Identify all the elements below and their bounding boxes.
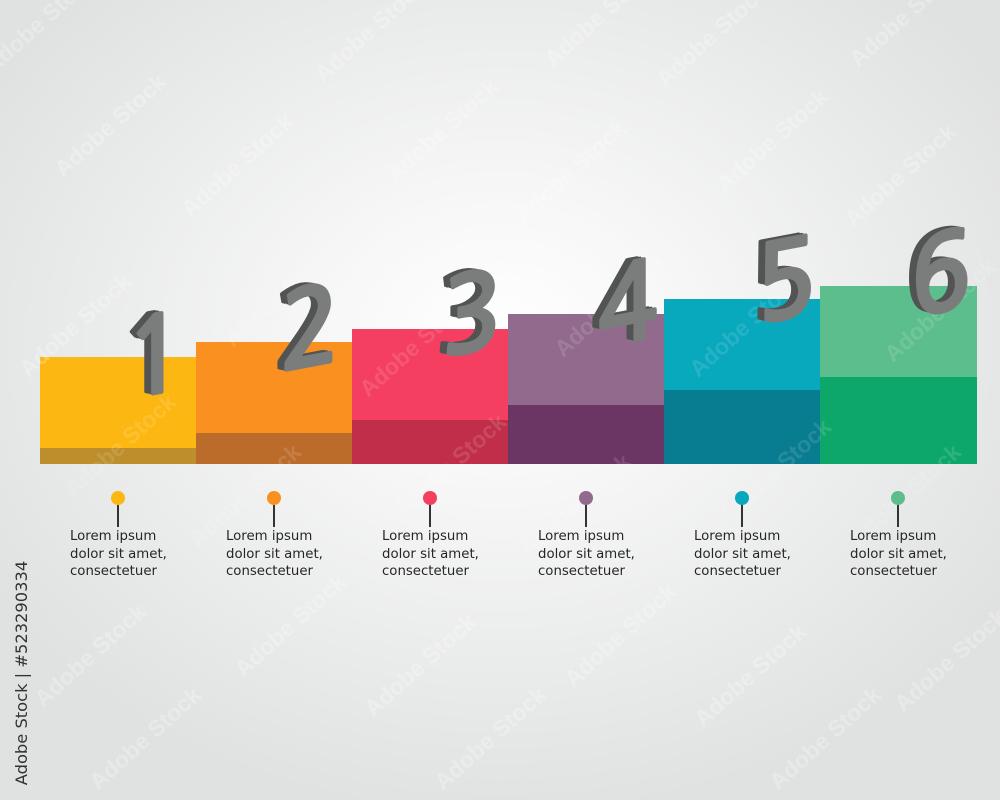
number 6: 6 [910, 216, 972, 334]
item 4: pin and text: consectetuer [538, 564, 625, 579]
watermark pattern: Adobe Stock [14, 268, 136, 382]
watermark pattern: Adobe Stock [684, 268, 806, 382]
item 6: pin and text [850, 491, 947, 579]
number 1: 1 [124, 298, 186, 416]
item 4: pin and text [538, 491, 635, 579]
item 3: pin and text [382, 491, 479, 579]
item 5: pin and text: Lorem ipsum [694, 529, 780, 544]
watermark pattern: Adobe Stock [59, 388, 181, 502]
item 3: pin and text: dolor sit amet, [382, 546, 479, 562]
item 2: pin and text: dolor sit amet, [226, 546, 323, 562]
bar 4 [508, 314, 664, 464]
item 6: pin and text: dolor sit amet, [850, 546, 947, 562]
stock id side text: Adobe Stock | #523290334 [12, 561, 31, 785]
item 5: pin and text [694, 491, 791, 579]
bar 5 [664, 299, 820, 464]
watermark pattern: Adobe Stock [176, 108, 298, 222]
watermark pattern: Adobe Stock [229, 568, 351, 682]
watermark pattern: Adobe Stock [359, 608, 481, 722]
item 4: pin and text: Lorem ipsum [538, 529, 624, 544]
bar 1 [40, 357, 196, 464]
item 2: pin and text: consectetuer [226, 564, 313, 579]
bar 3 [352, 329, 508, 464]
item 2: pin and text [226, 491, 323, 579]
watermark pattern: Adobe Stock [84, 681, 206, 795]
item 2: pin and text: Lorem ipsum [226, 529, 312, 544]
watermark pattern: Adobe Stock [49, 68, 171, 182]
item 1: pin and text: consectetuer [70, 564, 157, 579]
watermark pattern: Adobe Stock [764, 681, 886, 795]
item 3: pin and text: consectetuer [382, 564, 469, 579]
watermark pattern: Adobe Stock [509, 115, 631, 229]
item 5: pin and text: consectetuer [694, 564, 781, 579]
watermark pattern: Adobe Stock [839, 118, 961, 232]
watermark pattern: Adobe Stock [354, 288, 476, 402]
watermark pattern: Adobe Stock [389, 408, 511, 522]
item 1: pin and text: Lorem ipsum [70, 529, 156, 544]
watermark pattern: Adobe Stock [711, 83, 833, 197]
watermark pattern: Adobe Stock [879, 253, 1000, 367]
number 5: 5 [755, 223, 817, 341]
number 3: 3 [441, 256, 503, 374]
item 4: pin and text: dolor sit amet, [538, 546, 635, 562]
watermark pattern: Adobe Stock [29, 598, 151, 712]
item 6: pin and text: Lorem ipsum [850, 529, 936, 544]
watermark pattern: Adobe Stock [184, 438, 306, 552]
number 4: 4 [597, 246, 659, 364]
watermark pattern: Adobe Stock [219, 238, 341, 352]
watermark pattern: Adobe Stock [514, 448, 636, 562]
item 5: pin and text: dolor sit amet, [694, 546, 791, 562]
bar 2 [196, 342, 352, 464]
item 6: pin and text: consectetuer [850, 564, 937, 579]
watermark pattern: Adobe Stock [689, 618, 811, 732]
watermark pattern: Adobe Stock [429, 681, 551, 795]
bar 6 [820, 286, 977, 464]
number 2: 2 [279, 270, 341, 388]
watermark pattern: Adobe Stock [714, 413, 836, 527]
watermark pattern: Adobe Stock [844, 438, 966, 552]
watermark pattern: Adobe Stock [381, 73, 503, 187]
item 1: pin and text [70, 491, 167, 579]
watermark pattern: Adobe Stock [559, 578, 681, 692]
item 1: pin and text: dolor sit amet, [70, 546, 167, 562]
item 3: pin and text: Lorem ipsum [382, 529, 468, 544]
watermark pattern: Adobe Stock [549, 248, 671, 362]
